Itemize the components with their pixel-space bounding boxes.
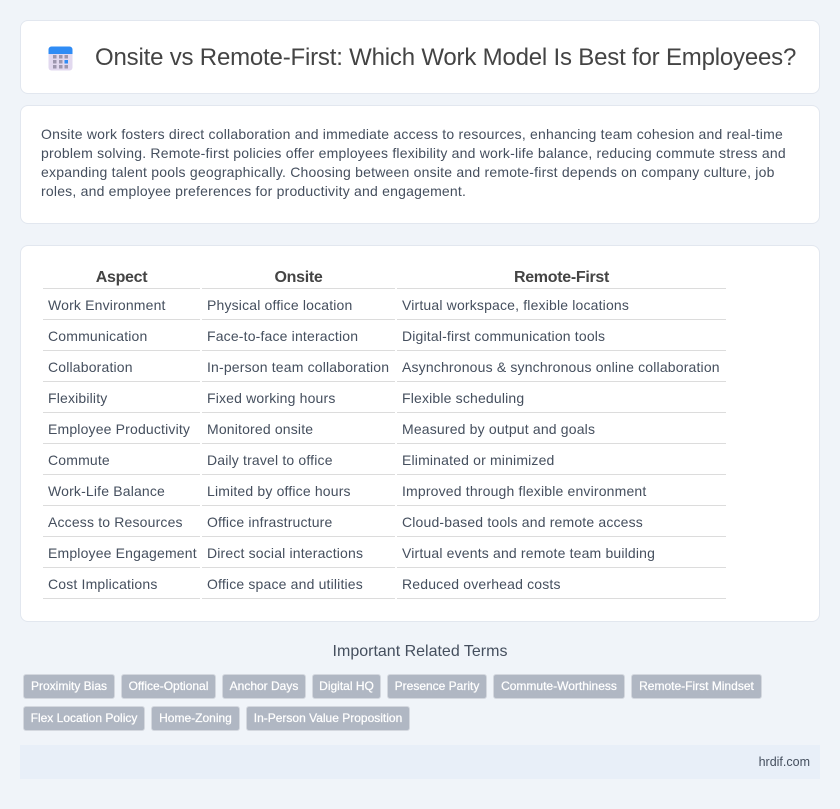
row: Collaboration: In-person team collaboration: [207, 359, 389, 375]
row: Work-Life Balance: Improved through flexible environment: [402, 483, 646, 499]
row: Employee Engagement: Direct social interactions: [207, 545, 363, 561]
row: Employee Productivity: [43, 421, 726, 444]
table header: [43, 269, 726, 289]
row: Communication: Face-to-face interaction: [207, 328, 358, 344]
text block: description: Onsite work fosters direct collaboration and immediate access to resources, enhancing team cohesion and real-time: [41, 126, 783, 142]
row: Employee Productivity: Employee Productivity: [48, 421, 190, 437]
tags: related terms: Anchor Days: [230, 679, 298, 693]
row: Commute: Commute: [48, 452, 110, 468]
row: Access to Resources: Cloud-based tools and remote access: [402, 514, 643, 530]
tags: related terms: Remote-First Mindset: [639, 679, 754, 693]
row: Cost Implications: [43, 576, 726, 599]
row: Employee Productivity: Measured by output and goals: [402, 421, 595, 437]
tags: related terms: [23, 674, 762, 731]
panel: description: [20, 105, 820, 224]
row: Communication: Communication: [48, 328, 147, 344]
row: Work Environment: [43, 297, 726, 320]
footer: [20, 745, 820, 779]
row: Employee Productivity: Monitored onsite: [207, 421, 313, 437]
row: Cost Implications: Reduced overhead costs: [402, 576, 561, 592]
row: Communication: Digital-first communication tools: [402, 328, 605, 344]
row: Communication: [43, 328, 726, 351]
row: Employee Engagement: Employee Engagement: [48, 545, 197, 561]
row: Flexibility: Flexibility: [48, 390, 107, 406]
row: Work Environment: Virtual workspace, flexible locations: [402, 297, 629, 313]
tags: related terms: In-Person Value Proposition: [254, 711, 402, 725]
tags: related terms: Presence Parity: [395, 679, 479, 693]
row: Commute: Daily travel to office: [207, 452, 333, 468]
row: Commute: [43, 452, 726, 475]
footer source text: hrdif.com: [759, 755, 810, 769]
row: Commute: Eliminated or minimized: [402, 452, 555, 468]
row: Cost Implications: Cost Implications: [48, 576, 157, 592]
heading: related terms: Important Related Terms: [333, 643, 507, 660]
tags: related terms: Flex Location Policy: [31, 711, 137, 725]
table header: Remote-First: [514, 269, 609, 286]
tags: related terms: Home-Zoning: [159, 711, 232, 725]
row: Collaboration: [43, 359, 726, 382]
panel: header: [20, 20, 820, 94]
row: Flexibility: [43, 390, 726, 413]
row: Work-Life Balance: [43, 483, 726, 506]
row: Work Environment: Work Environment: [48, 297, 166, 313]
panel: comparison table: [20, 245, 820, 622]
text block: description: roles, and employee preferences for productivity and engagement.: [41, 183, 466, 199]
row: Work-Life Balance: Limited by office hours: [207, 483, 351, 499]
icon: calendar: [48, 46, 72, 70]
table header: Aspect: [96, 269, 147, 286]
table header: Onsite: [274, 269, 322, 286]
row: Collaboration: Collaboration: [48, 359, 133, 375]
row: Collaboration: Asynchronous & synchronous online collaboration: [402, 359, 720, 375]
row: Employee Engagement: Virtual events and remote team building: [402, 545, 655, 561]
tags: related terms: Office-Optional: [129, 679, 208, 693]
text block: description: problem solving. Remote-first policies offer employees flexibility and work-life balance, reducing commute stress and: [41, 145, 786, 161]
tags: related terms: Commute-Worthiness: [501, 679, 617, 693]
text block: description: [41, 126, 786, 199]
row: Access to Resources: Office infrastructure: [207, 514, 332, 530]
title: Onsite vs Remote-First: Which Work Model Is Best for Employees?: [95, 44, 796, 71]
text block: description: expanding talent pools geographically. Choosing between onsite and remote-first depends on company culture, job: [41, 164, 775, 180]
row: Employee Engagement: [43, 545, 726, 568]
row: Flexibility: Fixed working hours: [207, 390, 336, 406]
row: Cost Implications: Office space and utilities: [207, 576, 363, 592]
row: Access to Resources: Access to Resources: [48, 514, 183, 530]
tags: related terms: Proximity Bias: [31, 679, 107, 693]
tags: related terms: Digital HQ: [319, 679, 374, 693]
row: Work Environment: Physical office location: [207, 297, 352, 313]
row: Flexibility: Flexible scheduling: [402, 390, 524, 406]
row: Work-Life Balance: Work-Life Balance: [48, 483, 165, 499]
row: Access to Resources: [43, 514, 726, 537]
